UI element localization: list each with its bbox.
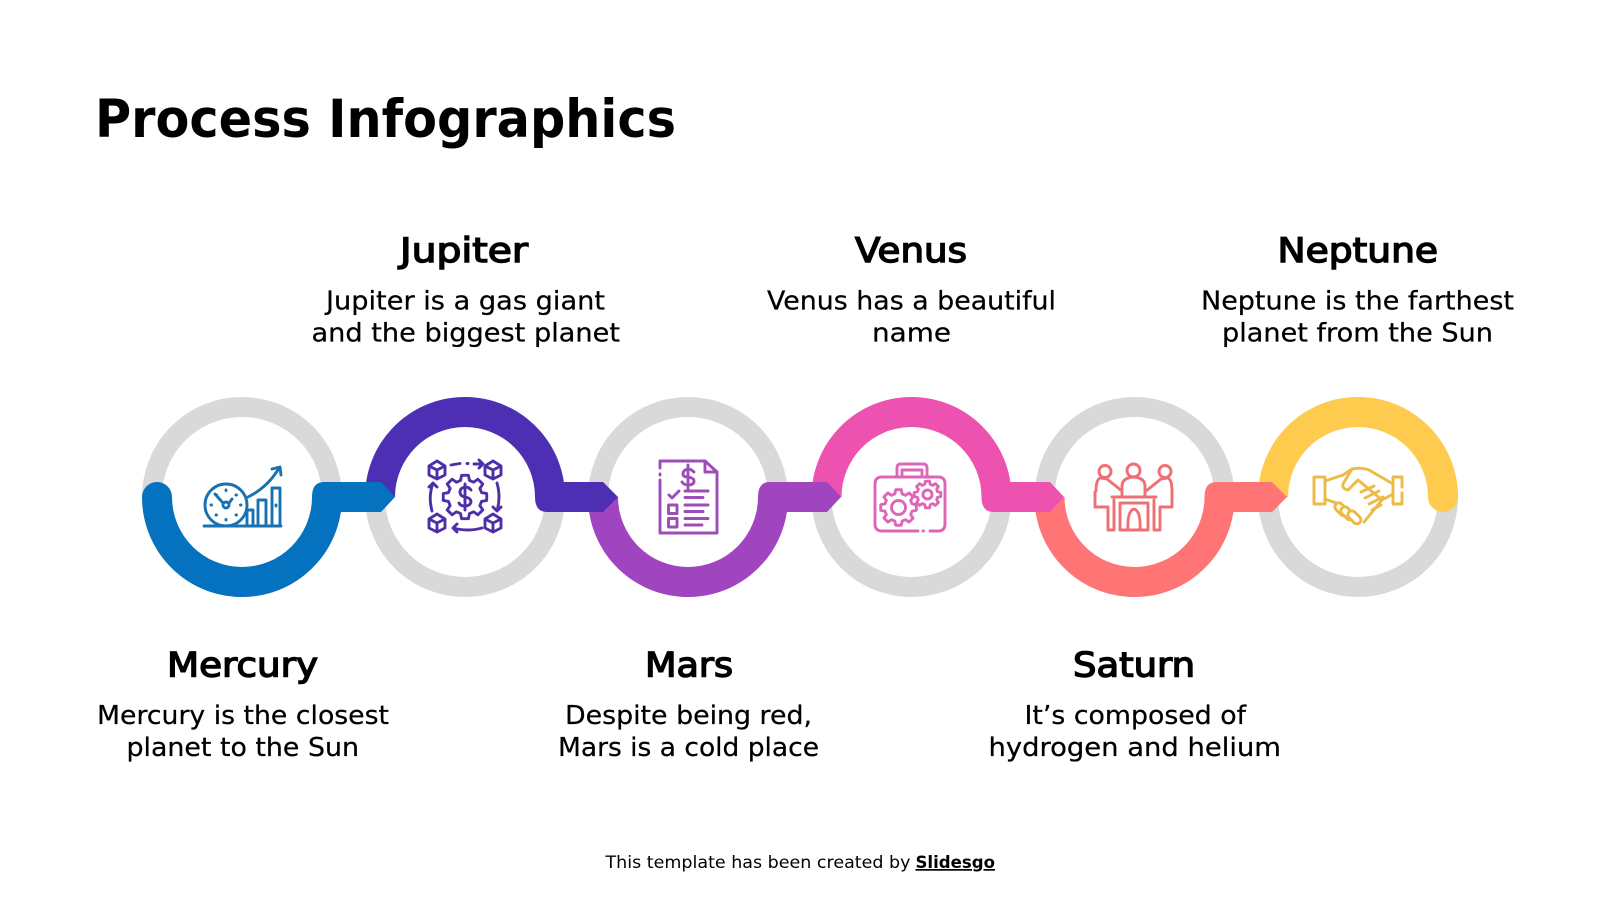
text block: Mercury xyxy=(97,646,389,763)
text block: Neptune: planet from the Sun xyxy=(1222,318,1493,348)
heading: Mars xyxy=(645,646,733,686)
text block: Venus xyxy=(767,231,1056,348)
footer credit: Slidesgo xyxy=(916,853,995,873)
step: Neptune ring xyxy=(1258,397,1458,587)
step: Mercury ring xyxy=(142,407,395,597)
text block: Neptune xyxy=(1201,231,1514,348)
step: Saturn ring xyxy=(1034,407,1287,597)
text block: Saturn xyxy=(988,646,1281,763)
text block: Saturn: hydrogen and helium xyxy=(988,733,1281,763)
icon: toolbox with gears xyxy=(875,464,945,531)
blue arc with arrow xyxy=(142,482,395,597)
icon: meeting table xyxy=(1095,464,1172,530)
gray ring xyxy=(598,407,778,587)
text block: Mars xyxy=(558,646,819,763)
description: Neptune is the farthest xyxy=(1201,286,1514,316)
heading: Jupiter xyxy=(398,231,528,271)
heading: Mercury xyxy=(167,646,318,686)
heading: Saturn xyxy=(1073,646,1195,686)
indigo arc with arrow xyxy=(365,397,618,512)
yellow arc xyxy=(1258,397,1458,512)
gray ring xyxy=(152,407,332,587)
gray ring xyxy=(822,407,1002,587)
gray ring xyxy=(1268,407,1448,587)
description: Mercury is the closest xyxy=(97,701,389,731)
text block: Mercury: planet to the Sun xyxy=(126,733,359,763)
text block: Jupiter: and the biggest planet xyxy=(312,318,620,348)
description: It’s composed of xyxy=(1024,701,1247,731)
gray ring xyxy=(1044,407,1224,587)
icon: invoice document xyxy=(660,461,717,533)
coral arc with arrow xyxy=(1034,482,1287,597)
gray ring xyxy=(375,407,555,587)
step: Venus ring xyxy=(812,397,1064,587)
violet arc with arrow xyxy=(588,482,841,597)
footer credit: This template has been created by xyxy=(604,853,910,873)
text block: Mars: Mars is a cold place xyxy=(558,733,819,763)
icon: clock and growth chart xyxy=(204,467,281,526)
heading: Venus xyxy=(855,231,967,271)
title: Process Infographics xyxy=(95,89,676,150)
heading: Neptune xyxy=(1278,231,1438,271)
icon: handshake xyxy=(1314,468,1402,525)
description: Despite being red, xyxy=(565,701,812,731)
step: Mars ring xyxy=(588,407,841,597)
step: Jupiter ring xyxy=(365,397,618,587)
description: Venus has a beautiful xyxy=(767,286,1056,316)
description: Jupiter is a gas giant xyxy=(324,286,605,316)
text block: Venus: name xyxy=(872,318,951,348)
pink arc with arrow xyxy=(812,397,1064,512)
text block: Jupiter xyxy=(312,231,620,348)
icon: gear with cubes xyxy=(429,460,501,532)
